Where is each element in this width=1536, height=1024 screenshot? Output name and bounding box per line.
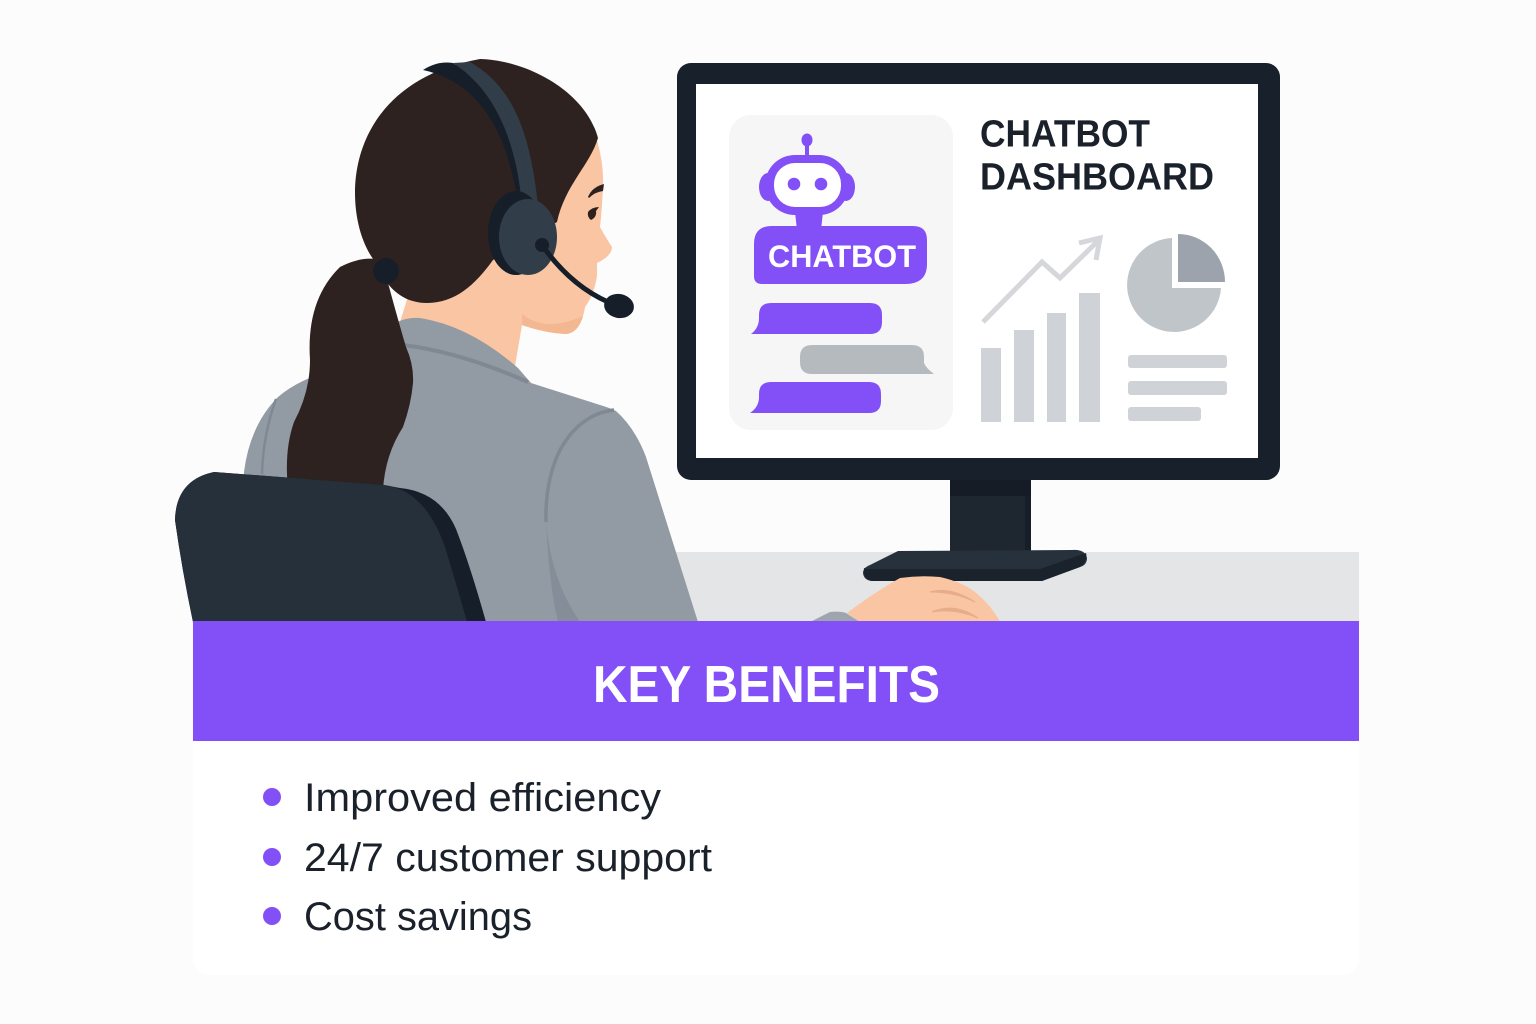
chair [175, 472, 486, 622]
eye [588, 207, 599, 220]
pie chart [1127, 234, 1225, 332]
panel: benefits list background [193, 700, 1359, 975]
bar chart with trend arrow [981, 238, 1100, 422]
chat bubble: gray [800, 345, 934, 374]
agent figure [175, 59, 1000, 622]
hair [355, 59, 598, 303]
ponytail [287, 259, 413, 490]
monitor frame [677, 63, 1280, 480]
benefit: cost savings: Cost savings [304, 895, 532, 939]
monitor stand [863, 478, 1087, 581]
neck and face [400, 140, 612, 366]
desk [660, 552, 1359, 622]
chat bubble: purple [750, 382, 881, 413]
dashboard title: DASHBOARD [980, 156, 1214, 198]
dashboard title: CHATBOT [980, 114, 1150, 156]
benefit list [263, 776, 712, 939]
text lines placeholder [1128, 355, 1227, 421]
headband [423, 63, 522, 205]
banner: key benefits: KEY BENEFITS [593, 656, 940, 714]
chat bubble: purple [751, 303, 882, 334]
jacket [244, 318, 698, 622]
hand [810, 576, 1000, 622]
monitor screen [696, 84, 1258, 458]
jaw shadow [522, 314, 583, 334]
chatbot label: CHATBOT [768, 238, 916, 274]
microphone boom [542, 245, 608, 302]
dashboard title [980, 114, 1214, 198]
panel: chatbot [729, 115, 953, 430]
ear cup [488, 191, 544, 275]
chatbot label [754, 226, 927, 284]
monitor [677, 63, 1280, 581]
hair tie [373, 258, 399, 284]
benefit: 24/7 customer support: 24/7 customer support [304, 836, 712, 880]
icon: robot [759, 134, 855, 230]
headset [423, 62, 636, 320]
benefit: improved efficiency: Improved efficiency [304, 776, 661, 820]
eyebrow [588, 184, 604, 198]
banner: key benefits [193, 621, 1359, 741]
